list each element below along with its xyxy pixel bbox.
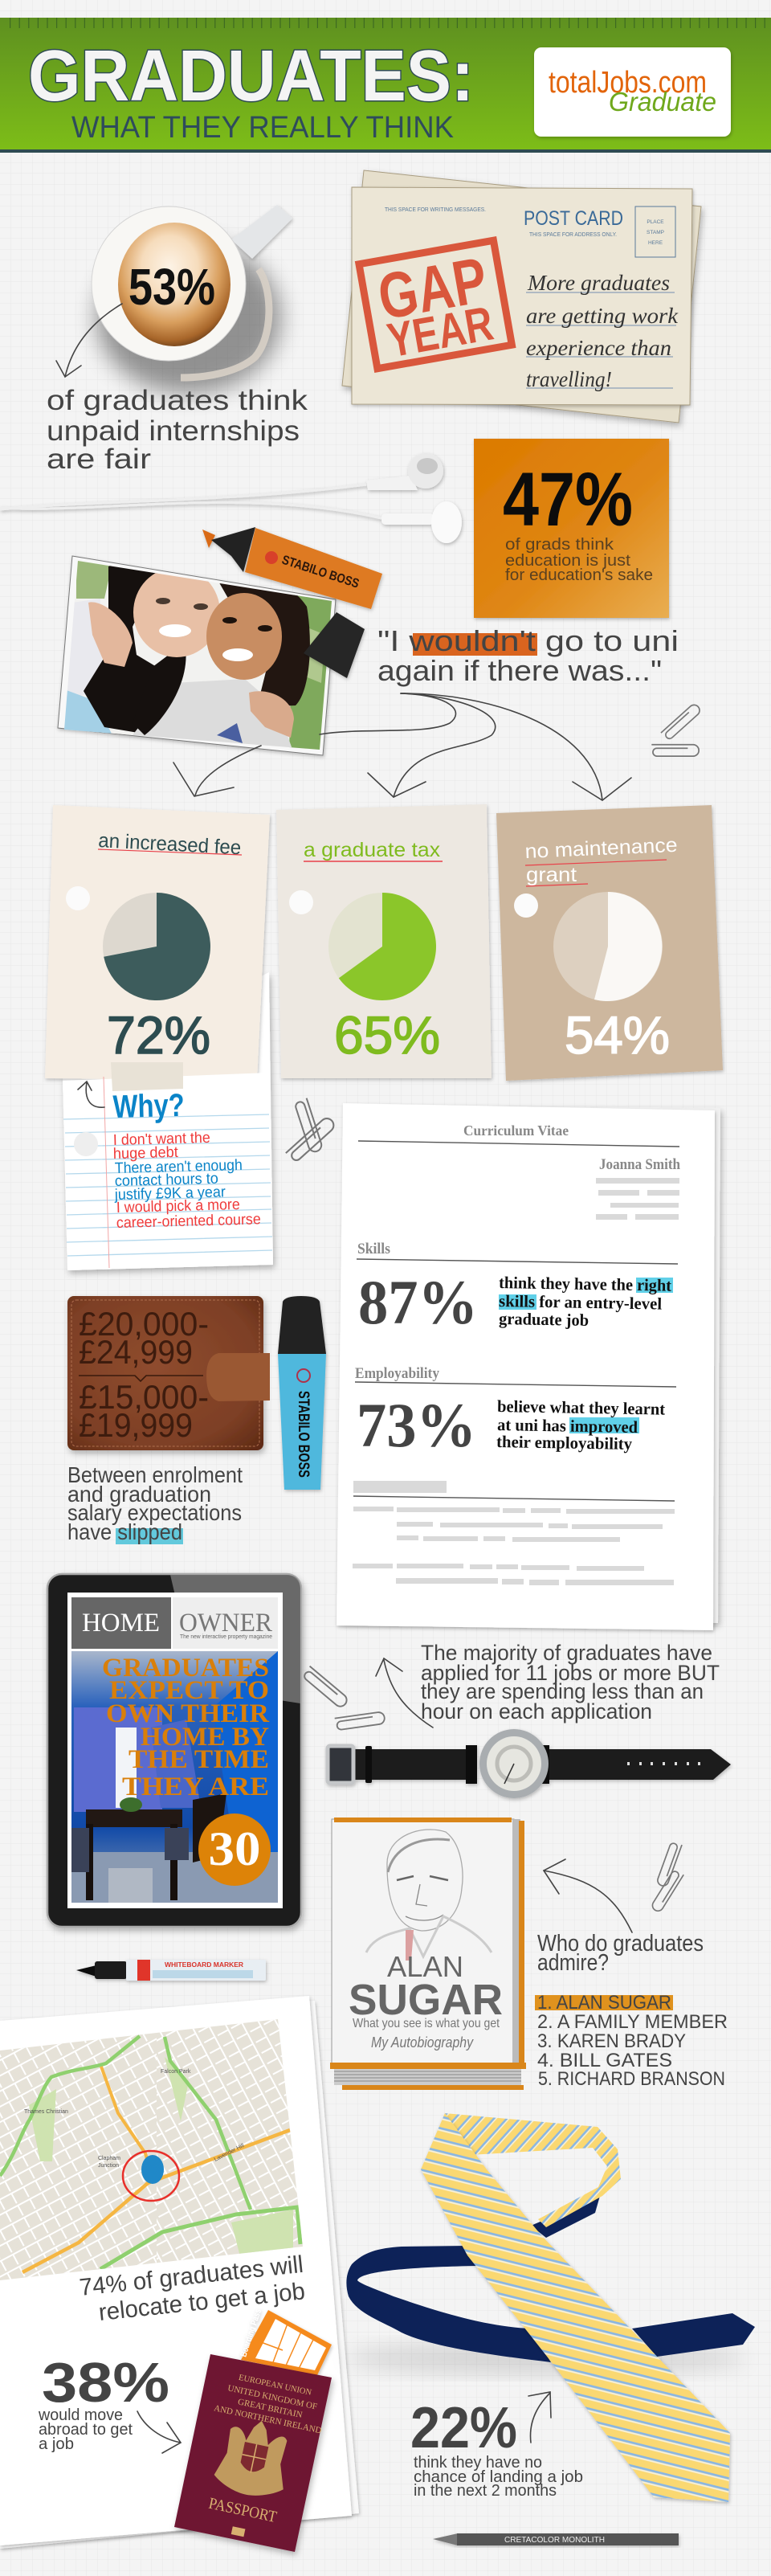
wallet with salary figures: £20,000- [79, 1305, 209, 1343]
skills section: 87% [358, 1267, 478, 1337]
magazine headline: THE TIME [128, 1745, 269, 1774]
text: job applications: hour on each application [421, 1699, 652, 1723]
stamp: gap year: GAP [373, 243, 492, 333]
stat: 38%: 38% [42, 2351, 169, 2414]
passport: GREAT BRITAIN [237, 2397, 304, 2420]
skills section: think they have the right [499, 1273, 671, 1295]
tie: navy underside [346, 2196, 755, 2362]
pencil [433, 2533, 679, 2545]
sticky note: 47% [474, 439, 669, 618]
postcard: gap year: STAMP [647, 230, 664, 235]
curriculum vitae page: Curriculum Vitae [463, 1122, 569, 1139]
postcard message [526, 271, 679, 391]
wallet with salary figures: £24,999 [79, 1333, 193, 1371]
earphones [0, 453, 462, 543]
card: no maintenance grant [496, 805, 723, 1081]
reasons list: contact hours to [115, 1171, 218, 1190]
stamp: gap year: YEAR [383, 296, 497, 367]
label: cretacolor: CRETACOLOR MONOLITH [504, 2536, 605, 2545]
highlighter: orange [202, 527, 382, 609]
skills section: graduate job [499, 1309, 589, 1330]
text: salary expectations: and graduation [67, 1482, 211, 1507]
reasons list: I would pick a more [116, 1196, 240, 1216]
skills section: Skills [357, 1241, 390, 1257]
tablet: home owner magazine: The new interactive property magazine [180, 1634, 272, 1640]
text: job applications [421, 1641, 720, 1723]
magazine cover image [71, 1651, 278, 1903]
magazine headline: OWN THEIR [106, 1699, 270, 1728]
sticky note: 47%: for education's sake [505, 566, 653, 584]
postcard message: are getting work [526, 304, 679, 328]
pie chart: 72% [103, 893, 210, 1000]
employability section [355, 1365, 676, 1460]
text: relocate: relocate to get a job [97, 2278, 306, 2326]
wristwatch [328, 1729, 731, 1798]
text: who do graduates admire: admire? [537, 1950, 609, 1976]
label: whiteboard marker: WHITEBOARD MARKER [165, 1961, 243, 1969]
map labels: Falcon Park [161, 2069, 191, 2075]
card: no maintenance grant: 54% [565, 1005, 670, 1065]
note paper: why [63, 972, 273, 1270]
book title: ALAN [387, 1950, 463, 1983]
reasons list: There aren't enough [115, 1157, 243, 1177]
quote: I wouldn't go to uni [377, 624, 679, 687]
highlighter: blue [278, 1296, 326, 1490]
postcard message: experience than [526, 336, 671, 360]
arrow: to passport [137, 2411, 181, 2453]
stat: 22%: chance of landing a job [414, 2468, 583, 2486]
card: an increased fee: 72% [107, 1005, 210, 1065]
arrow: to tie [528, 2392, 551, 2443]
necktie [345, 2113, 755, 2502]
map labels: Lavender Hill [214, 2143, 246, 2163]
list: most admired: 4. BILL GATES [537, 2050, 672, 2071]
employability section: Employability [355, 1365, 439, 1382]
book: alan sugar autobiography [330, 1818, 526, 2090]
text: relocate [78, 2251, 306, 2326]
card: an increased fee [45, 805, 270, 1081]
redacted experience lines [353, 1481, 675, 1585]
text: salary expectations: have slipped [67, 1519, 182, 1544]
postcard: gap year: PLACE [647, 219, 664, 225]
magazine headline [102, 1654, 270, 1801]
book title: SUGAR [349, 1976, 503, 2024]
arrow: to job applications [376, 1658, 433, 1728]
postcard: gap year: THIS SPACE FOR WRITING MESSAGES. [385, 206, 486, 213]
card: an increased fee: an increased fee [98, 829, 242, 859]
wallet with salary figures: £15,000- [79, 1378, 209, 1416]
redacted address lines [596, 1178, 679, 1220]
reasons list: justify £9K a year [114, 1184, 226, 1204]
postcard: gap year: POST CARD [524, 207, 623, 230]
text: relocate: 74% of graduates will [78, 2251, 304, 2301]
text: who do graduates admire [537, 1931, 704, 1976]
reasons list: I don't want the [113, 1130, 210, 1149]
passport: EUROPEAN UNION [238, 2374, 312, 2398]
card: a graduate tax [276, 804, 492, 1078]
quote: I wouldn't go to uni: "I wouldn't go to uni [377, 624, 679, 657]
header banner [0, 18, 771, 153]
stat: 38% [38, 2351, 169, 2453]
arrow: cup to caption [56, 304, 122, 377]
book title [349, 1950, 503, 2051]
text: job applications: The majority of graduates have [421, 1641, 712, 1665]
street map [0, 2019, 303, 2280]
text: job applications: applied for 11 jobs or more BUT [421, 1661, 720, 1685]
pin and red ring [123, 2151, 179, 2201]
text: salary expectations: Between enrolment [67, 1462, 243, 1487]
stat: 53%: 53% [128, 258, 215, 316]
pie chart: 54% [553, 892, 663, 1001]
badge: 30: 30 [209, 1822, 260, 1875]
wallet with salary figures [67, 1296, 270, 1450]
title: GRADUATES: [28, 36, 474, 117]
employability section: their employability [496, 1432, 633, 1454]
magazine headline: HOME BY [141, 1723, 269, 1752]
map labels: Clapham [98, 2156, 120, 2161]
reasons list [113, 1130, 261, 1232]
passport: AND NORTHERN IRELAND [213, 2403, 323, 2435]
highlighter cap [304, 612, 365, 678]
label: stabilo boss blue: STABILO BOSS [295, 1391, 312, 1478]
curriculum vitae page: Joanna Smith [599, 1156, 680, 1173]
employability section: at uni has improved [497, 1415, 638, 1437]
skills section [357, 1241, 678, 1337]
tablet: home owner magazine: OWNER [179, 1609, 272, 1638]
sticky note: 47%: 47% [503, 457, 633, 542]
curriculum vitae page [337, 1103, 720, 1630]
employability section: 73% [357, 1390, 476, 1460]
book title: My Autobiography [371, 2034, 474, 2051]
stat: 38%: would move [38, 2406, 123, 2424]
text: unpaid internships [47, 385, 308, 475]
card: a graduate tax: 65% [334, 1005, 440, 1065]
arrow: card to why [78, 1082, 104, 1107]
list: most admired: 1. ALAN SUGAR [537, 1992, 671, 2014]
paper clips [651, 703, 702, 756]
stat: 38%: abroad to get [39, 2421, 133, 2439]
stat: 22% [410, 2396, 583, 2500]
paper clips near watch [302, 1666, 386, 1730]
passport: PASSPORT [207, 2495, 279, 2526]
pie chart: 65% [328, 893, 436, 1000]
card: a graduate tax: a graduate tax [304, 839, 441, 861]
postcard: gap year: HERE [648, 240, 663, 246]
logo: totaljobs graduate: totalJobs.com [549, 66, 707, 100]
magazine headline: EXPECT TO [109, 1676, 269, 1705]
skills section: skills for an entry-level [499, 1291, 662, 1314]
text: salary expectations [67, 1462, 243, 1544]
paper clips near book [651, 1841, 683, 1913]
text: job applications: they are spending less than an [421, 1679, 704, 1703]
coffee cup with 53% [92, 205, 292, 394]
paper clips: pair [286, 1098, 337, 1163]
arrows: to the three options [173, 693, 631, 800]
stat: 22%: 22% [410, 2396, 517, 2460]
logo: totaljobs graduate [534, 47, 731, 137]
tie: striped blade [421, 2113, 730, 2502]
postcard message: travelling! [526, 367, 612, 391]
card: no maintenance grant: no maintenance [524, 834, 678, 863]
passport: UNITED KINGDOM OF [226, 2383, 318, 2412]
passport [174, 2354, 332, 2552]
note paper content: why [63, 1062, 273, 1270]
stamp: gap year [359, 240, 512, 370]
map labels: Junction [98, 2163, 119, 2169]
whiteboard marker [76, 1960, 266, 1981]
text: salary expectations: salary expectations [67, 1500, 242, 1525]
label: boarding pass: Boarding Pass [239, 2308, 263, 2358]
postcard message: More graduates [527, 271, 670, 295]
stat: 38%: a job [39, 2435, 74, 2453]
text: unpaid internships: are fair [47, 444, 151, 475]
card: no maintenance grant: grant [526, 864, 577, 886]
logo: totaljobs graduate: Graduate [609, 87, 716, 117]
quote: I wouldn't go to uni: again if there was..." [377, 654, 662, 687]
magazine headline: GRADUATES [102, 1654, 269, 1683]
photo: two graduates [56, 554, 337, 755]
tape [111, 1062, 183, 1091]
map labels [24, 2069, 246, 2169]
stat: 22%: in the next 2 months [414, 2482, 557, 2500]
sticky note: 47%: of grads think [505, 536, 614, 554]
list: most admired: 3. KAREN BRADY [537, 2030, 686, 2052]
tablet: home owner magazine [47, 1574, 301, 1927]
subtitle: WHAT THEY REALLY THINK [71, 111, 454, 145]
sticky note: 47%: education is just [505, 552, 630, 570]
list: most admired: 2. A FAMILY MEMBER [537, 2011, 728, 2033]
magazine headline: THEY ARE [122, 1773, 269, 1801]
text: unpaid internships: of graduates think [47, 385, 308, 416]
boarding pass [239, 2308, 332, 2375]
sheet with map [0, 1996, 359, 2549]
stat: 22%: think they have no [414, 2454, 542, 2472]
arrow: admire [544, 1859, 632, 1932]
tablet: home owner magazine: HOME [82, 1609, 160, 1638]
book title: What you see is what you get [353, 2017, 500, 2030]
heading: why: Why? [112, 1088, 185, 1125]
employability section: believe what they learnt [497, 1396, 665, 1419]
postcard: gap year: THIS SPACE FOR ADDRESS ONLY. [529, 231, 617, 238]
wallet with salary figures: £19,999 [79, 1406, 193, 1444]
portrait sketch [366, 1830, 492, 1961]
tie: striped neck loop [445, 2113, 621, 2227]
reasons list: career-oriented course [116, 1211, 261, 1232]
badge: 30 [198, 1813, 271, 1886]
map labels: Thames Christian [24, 2109, 68, 2115]
reasons list: huge debt [113, 1144, 179, 1163]
crest [211, 2414, 296, 2502]
list: most admired [535, 1992, 728, 2090]
list: most admired: 5. RICHARD BRANSON [538, 2068, 725, 2090]
postcard: gap year [342, 170, 701, 423]
label: stabilo boss orange: STABILO BOSS [280, 554, 361, 591]
text: unpaid internships: unpaid internships [47, 415, 300, 447]
text: who do graduates admire: Who do graduates [537, 1931, 704, 1957]
